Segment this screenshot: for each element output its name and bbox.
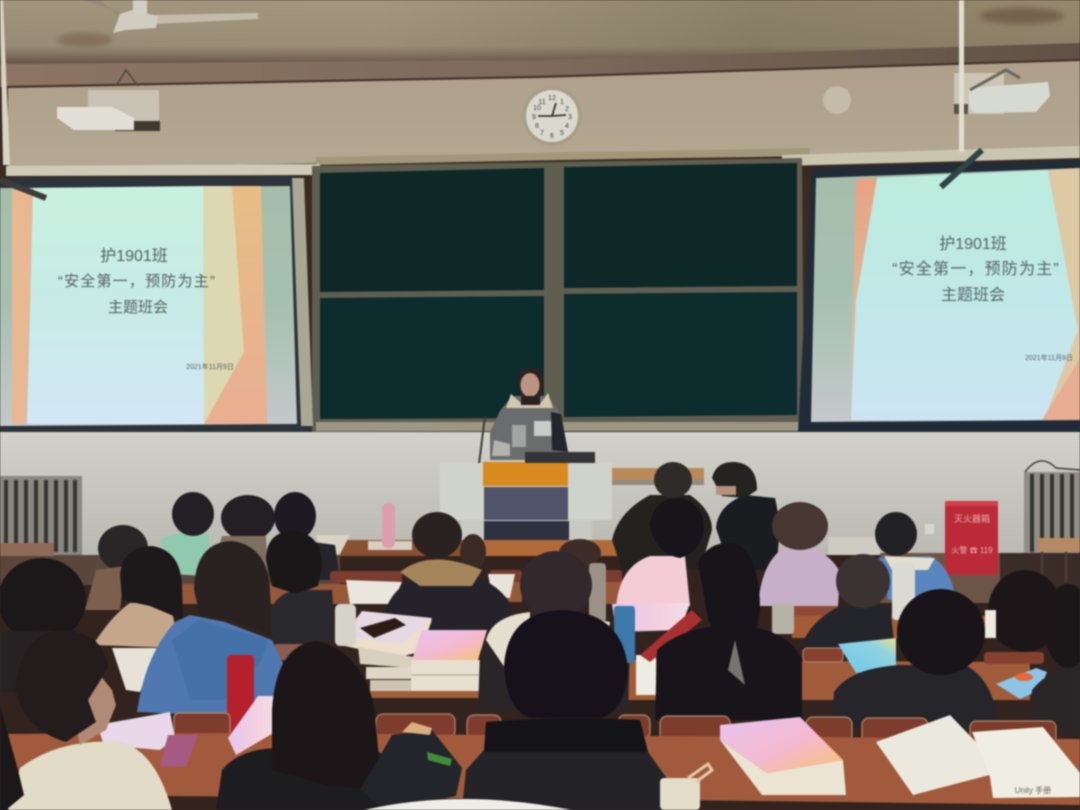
presenter — [490, 368, 568, 460]
student with hair clip — [800, 554, 895, 650]
clock: 6 — [550, 133, 554, 140]
student in black collar jacket — [462, 610, 668, 810]
slide title: “安全第一，预防为主” — [892, 260, 1060, 278]
clock: 5 — [560, 130, 564, 137]
ceiling fan — [85, 0, 258, 33]
clock: 10 — [533, 105, 541, 112]
fur collar student — [382, 512, 512, 632]
projector right — [954, 70, 1050, 114]
fire extinguisher box: 火警 ☎ 119 — [951, 545, 993, 555]
clock: 12 — [548, 95, 556, 102]
left screen — [0, 176, 313, 434]
water bottle foreground — [660, 764, 712, 810]
lilac hoodie student — [758, 502, 840, 606]
back row desk — [0, 503, 1080, 582]
wall beam — [0, 43, 1080, 87]
stacked books on desk — [335, 604, 487, 691]
right edge student — [1028, 584, 1080, 736]
students back row — [85, 462, 955, 610]
blackboard — [312, 158, 804, 432]
front desk — [0, 733, 1080, 805]
side table behind lectern — [612, 468, 704, 485]
long hair student in black — [640, 543, 802, 720]
slide title: 护1901班 — [100, 247, 168, 265]
second row desks and chairs — [180, 570, 992, 638]
radiator right — [1024, 461, 1080, 555]
front desk books: Unity 手册 — [1015, 785, 1051, 795]
clock: 1 — [560, 99, 564, 106]
students second row — [0, 498, 1062, 692]
slide title: “安全第一，预防为主” — [58, 272, 216, 290]
third row desks — [112, 603, 1047, 700]
dark jacket student — [266, 531, 336, 645]
ceiling — [0, 0, 1080, 66]
clock: 8 — [535, 123, 539, 130]
upper wall — [8, 61, 1080, 168]
chalk tray — [316, 422, 806, 431]
student with hood at lectern side — [612, 495, 712, 570]
right screen — [798, 160, 1080, 432]
clock: 4 — [565, 123, 569, 130]
microphone — [479, 416, 485, 464]
beam line — [6, 60, 1080, 87]
slide title — [892, 235, 1073, 362]
student in dark puffer, left — [216, 641, 400, 810]
room floor and seating base — [0, 537, 1080, 810]
chair backs — [174, 713, 1056, 744]
fire extinguisher box — [945, 501, 998, 575]
pink sweater student — [616, 498, 704, 606]
wall smoke detector — [823, 86, 851, 114]
cornice left — [6, 164, 320, 176]
clock: 3 — [568, 114, 572, 121]
clock: 2 — [565, 106, 569, 113]
student in cream hood — [0, 630, 172, 810]
wall socket — [925, 524, 934, 534]
slide title: 主题班会 — [108, 299, 168, 316]
lectern — [440, 452, 612, 542]
far left student — [0, 558, 86, 692]
front desk books — [97, 696, 1080, 798]
clock: 11 — [538, 99, 546, 106]
white hood student — [478, 551, 630, 712]
blue water bottle — [614, 606, 635, 663]
blue hoodie student — [137, 541, 285, 716]
right side student — [988, 570, 1062, 652]
beige coat student — [93, 546, 183, 648]
students front row — [0, 610, 712, 810]
slide title — [58, 247, 234, 371]
screen cord and bracket right — [941, 0, 982, 187]
clock: 9 — [532, 114, 536, 121]
clock: 7 — [540, 130, 544, 137]
clock — [522, 86, 582, 146]
white coat in foreground — [364, 799, 572, 810]
slide title: 2021年11月9日 — [186, 362, 234, 371]
screen bracket left — [0, 180, 46, 198]
lower wall — [0, 432, 1080, 562]
students third row — [137, 541, 1080, 736]
rod at left edge — [0, 0, 10, 165]
radiator left — [0, 476, 82, 556]
arm with green logo — [360, 722, 462, 810]
fire extinguisher box: 灭火器箱 — [954, 513, 990, 524]
cornice right — [782, 146, 1080, 166]
slide title: 2021年11月9日 — [1025, 353, 1073, 362]
cornice above boards — [316, 148, 810, 165]
slide title: 护1901班 — [939, 235, 1007, 253]
red drink bottle — [227, 655, 254, 739]
projector left — [57, 70, 160, 131]
slide title: 主题班会 — [941, 286, 1005, 304]
short hair student — [832, 589, 998, 728]
